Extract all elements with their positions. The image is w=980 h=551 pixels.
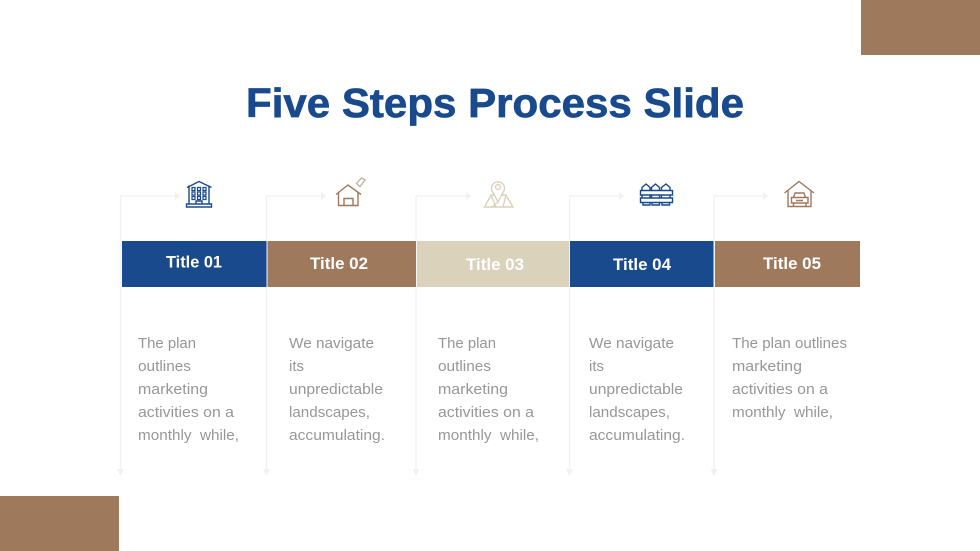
step text 5: activities on a [732, 381, 829, 398]
icon: fence [640, 184, 672, 205]
step text 4: its [589, 358, 604, 375]
step text 2: unpredictable [289, 381, 383, 398]
step header 5 [715, 241, 860, 287]
corner block: bottom left [0, 496, 119, 551]
step text 3: marketing [438, 381, 508, 398]
step text 1: outlines [138, 358, 191, 375]
step header 5: Title 05 [763, 254, 821, 273]
step text 4: landscapes, [589, 404, 670, 421]
step text 1 [138, 335, 239, 444]
step text 2: We navigate [289, 335, 374, 352]
step text 5: marketing [732, 358, 802, 375]
step text 1: The plan [138, 335, 196, 352]
step header 1: Title 01 [166, 252, 222, 272]
connector arrow 4 [566, 192, 624, 476]
step text 3: The plan [438, 335, 496, 352]
step header 2 [268, 241, 416, 287]
step text 3: activities on a [438, 404, 535, 421]
step header 4: Title 04 [613, 255, 672, 274]
icon: garage with car [784, 182, 814, 206]
step text 4: unpredictable [589, 381, 683, 398]
step header 3: Title 03 [466, 255, 524, 274]
step text 5: The plan outlines [732, 335, 847, 352]
step text 2: landscapes, [289, 404, 370, 421]
step text 5: monthly while, [732, 404, 833, 421]
step header 1 [122, 241, 266, 287]
connector arrow 3 [412, 192, 471, 476]
step text 3: monthly while, [438, 427, 539, 444]
step text 3 [438, 335, 539, 444]
step text 2: accumulating. [289, 427, 385, 444]
step header 2: Title 02 [310, 254, 368, 273]
step header 3 [417, 241, 569, 287]
step text 2 [289, 335, 385, 444]
step text 5 [732, 335, 847, 421]
step text 1: activities on a [138, 404, 235, 421]
corner block: top right [861, 0, 980, 55]
step text 3: outlines [438, 358, 491, 375]
icon: map pin [484, 182, 513, 207]
step text 4: accumulating. [589, 427, 685, 444]
connector arrow 2 [263, 192, 326, 476]
icon: house with price tag [336, 178, 365, 206]
step header 4 [570, 241, 714, 287]
title: Five Steps Process Slide [246, 80, 744, 126]
step text 1: monthly while, [138, 427, 239, 444]
step text 4: We navigate [589, 335, 674, 352]
connector arrow 1 [117, 192, 180, 476]
step text 1: marketing [138, 381, 208, 398]
step text 4 [589, 335, 685, 444]
step text 2: its [289, 358, 304, 375]
icon: apartment building [186, 182, 212, 207]
connector arrow 5 [710, 192, 768, 476]
